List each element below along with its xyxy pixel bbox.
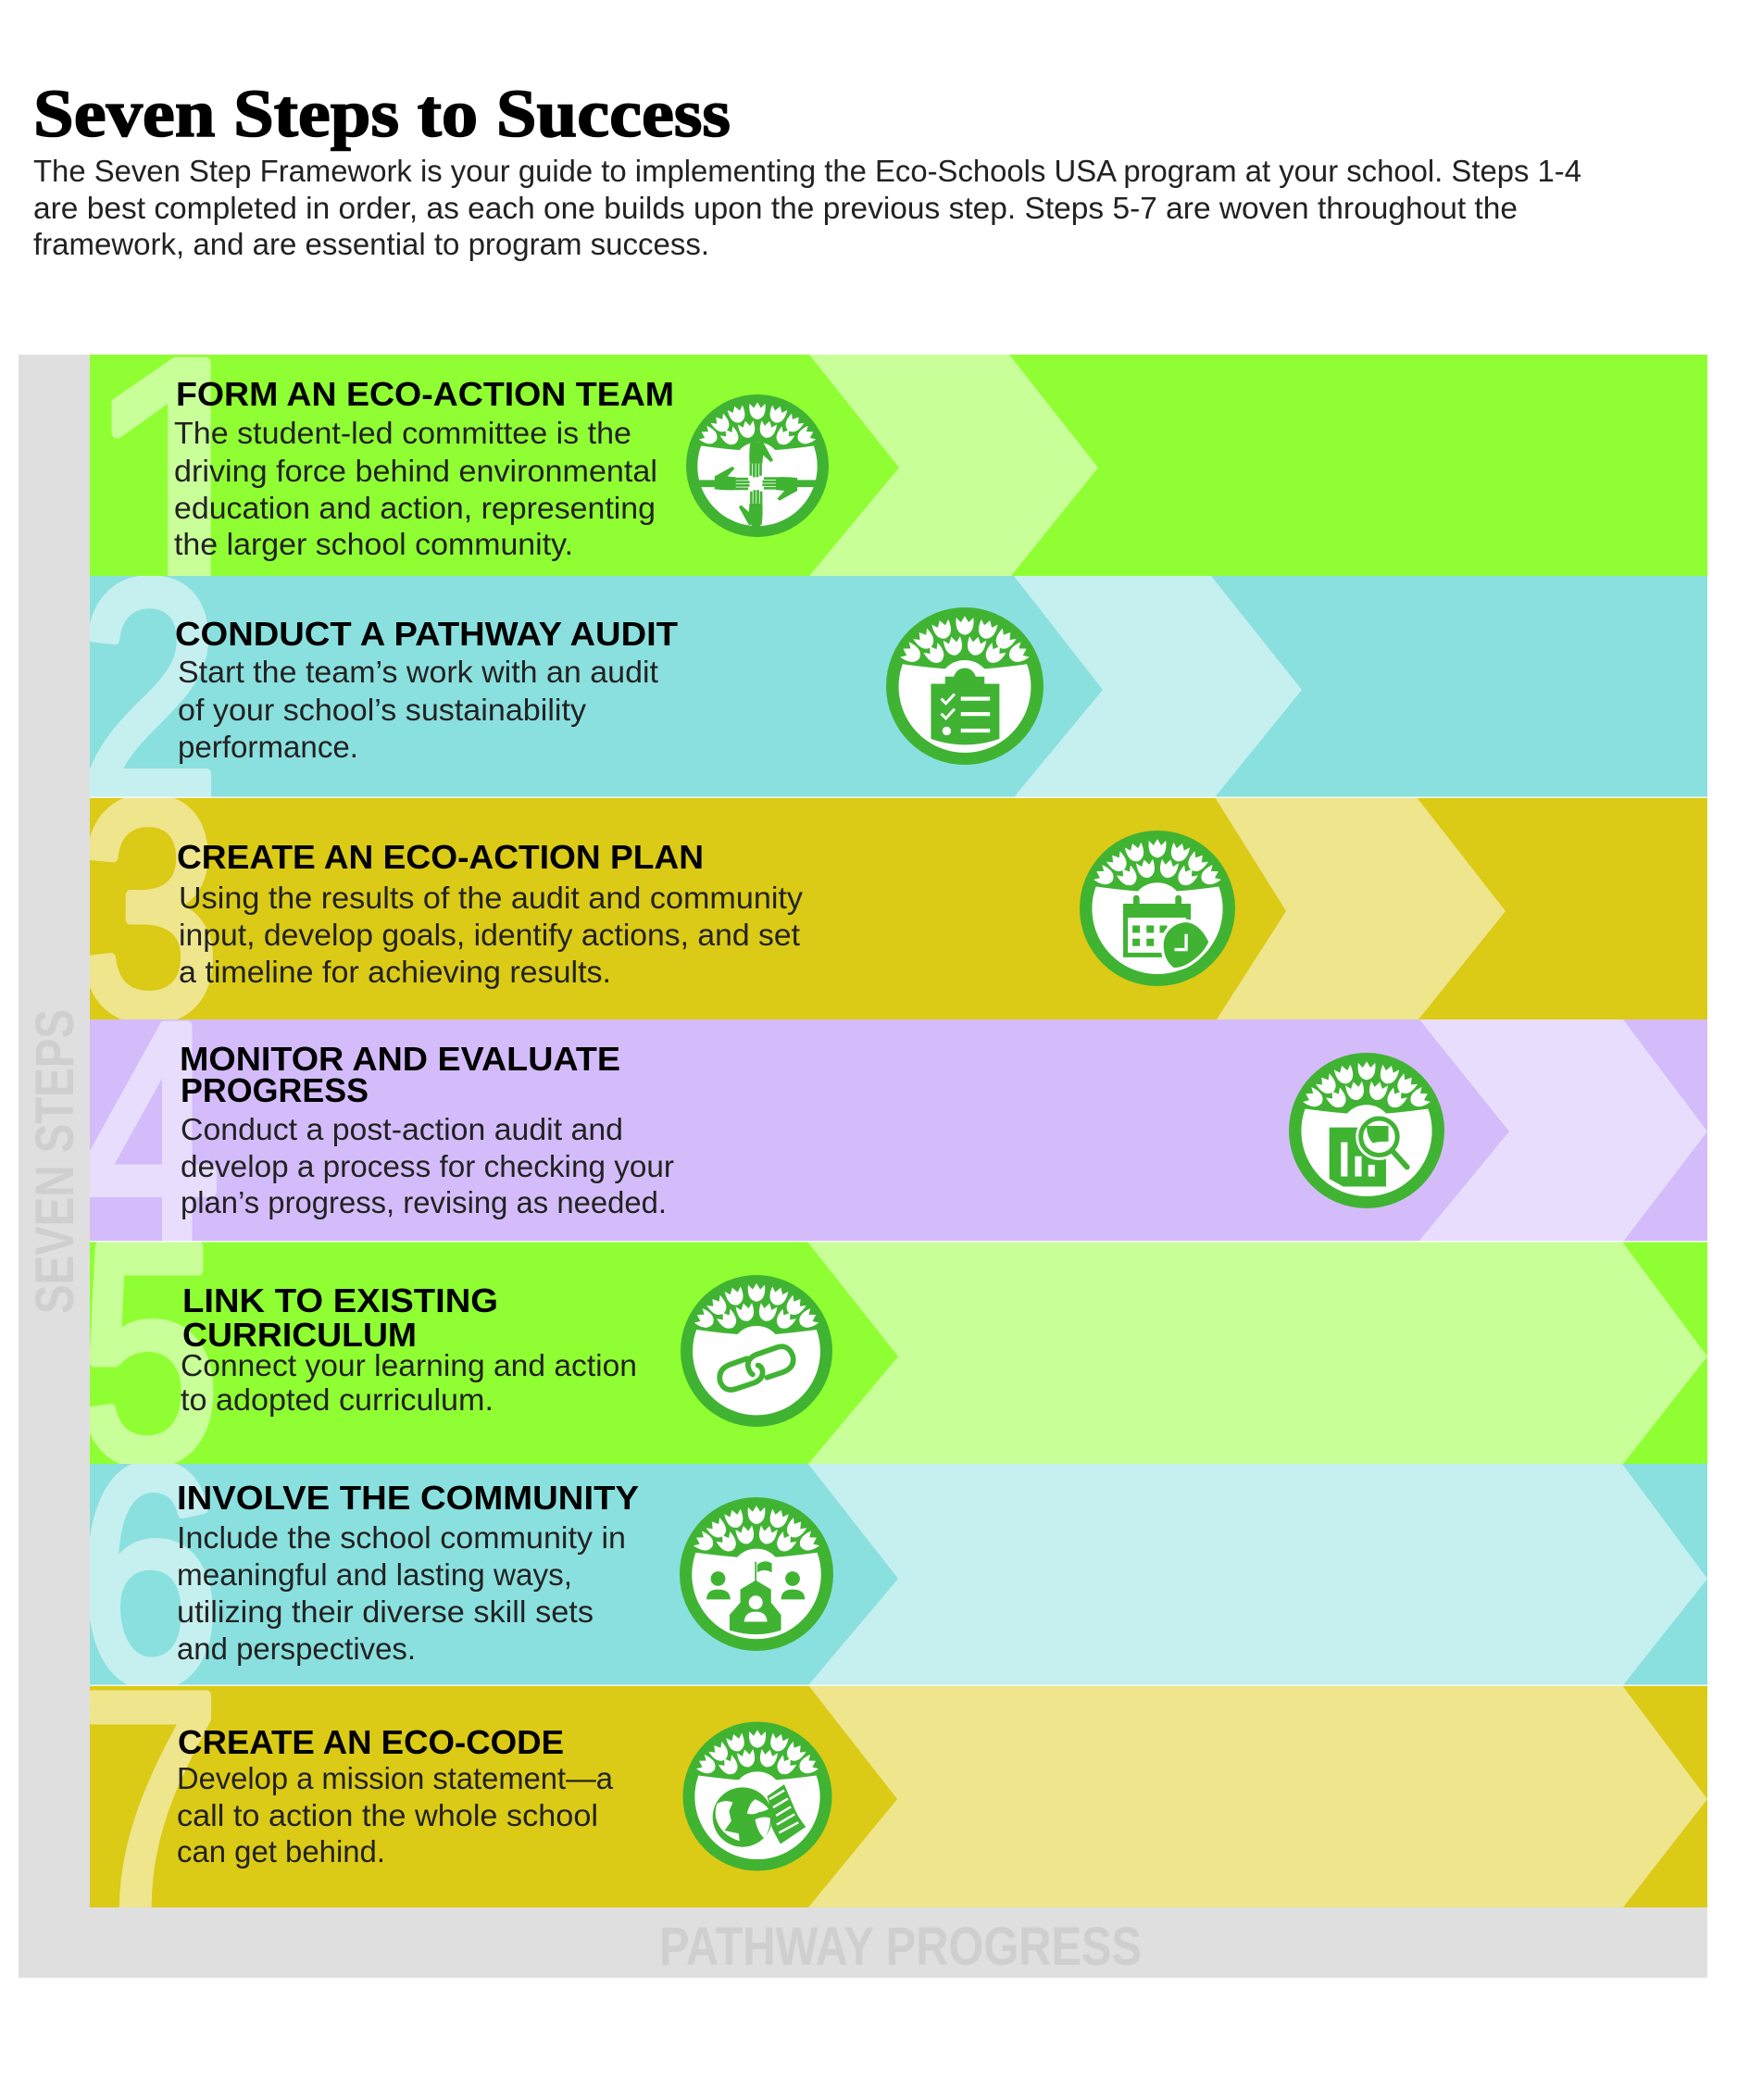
step 3 description: a timeline for achieving results. xyxy=(179,955,611,989)
step 5 heading: CURRICULUM xyxy=(182,1316,417,1354)
step 7 description xyxy=(177,1761,614,1869)
icon: clipboard checklist xyxy=(886,607,1043,765)
step 7 description: call to action the whole school xyxy=(177,1798,598,1832)
panel: step 3 xyxy=(90,797,1707,1019)
step 4 heading: PROGRESS xyxy=(181,1071,369,1109)
icon: four hands xyxy=(686,394,829,537)
step 3 description: Using the results of the audit and community xyxy=(179,881,804,915)
numeral 5: 5 xyxy=(79,1180,219,1526)
step 7 heading: CREATE AN ECO-CODE xyxy=(178,1723,564,1761)
step 4 description: develop a process for checking your xyxy=(181,1149,674,1183)
intro text block: are best completed in order, as each one builds upon the previous step. Steps 5-7 are woven throughout the xyxy=(33,191,1518,225)
step 1 description: the larger school community. xyxy=(174,527,573,561)
step 5 description xyxy=(181,1348,637,1417)
panel: step 7 xyxy=(90,1685,1707,1907)
chevron: step 2 progress xyxy=(1014,576,1302,797)
panel: step 5 xyxy=(90,1242,1707,1464)
step 4 description: plan’s progress, revising as needed. xyxy=(181,1185,667,1219)
step 2 description xyxy=(178,655,658,764)
step 5 heading: LINK TO EXISTING xyxy=(182,1281,498,1319)
intro text block: The Seven Step Framework is your guide to implementing the Eco-Schools USA program at your school. Steps 1-4 xyxy=(33,154,1581,188)
step 3 description: input, develop goals, identify actions, and set xyxy=(179,918,800,952)
step 5 description: Connect your learning and action xyxy=(181,1348,637,1382)
step 1 heading: FORM AN ECO-ACTION TEAM xyxy=(176,375,674,413)
step 5 heading xyxy=(182,1281,498,1354)
panel: step 6 xyxy=(90,1464,1707,1685)
step 1 description xyxy=(174,416,657,561)
axis label: seven steps: SEVEN STEPS xyxy=(25,1009,85,1314)
chevron: step 7 progress xyxy=(808,1685,1707,1907)
step 2 description: performance. xyxy=(178,730,358,764)
panel: step 4 xyxy=(90,1019,1707,1242)
step 6 description: and perspectives. xyxy=(177,1631,416,1666)
icon: chain link xyxy=(681,1275,832,1427)
icon: globe and document xyxy=(683,1722,831,1870)
step 3 heading: CREATE AN ECO-ACTION PLAN xyxy=(177,838,704,876)
step 4 description: Conduct a post-action audit and xyxy=(181,1112,623,1146)
chevron: step 6 progress xyxy=(808,1464,1707,1685)
step 2 heading: CONDUCT A PATHWAY AUDIT xyxy=(175,615,678,653)
step 7 description: Develop a mission statement—a xyxy=(177,1761,614,1795)
panel: step 1 xyxy=(90,355,1707,576)
step 7 description: can get behind. xyxy=(177,1834,385,1869)
numeral 1: 1 xyxy=(82,284,283,688)
step 6 description: meaningful and lasting ways, xyxy=(177,1557,572,1592)
step 6 heading: INVOLVE THE COMMUNITY xyxy=(177,1479,639,1517)
step 6 description: Include the school community in xyxy=(177,1520,626,1555)
title: Seven Steps to Success xyxy=(33,76,731,151)
intro text block: framework, and are essential to program success. xyxy=(33,227,709,261)
step 3 description xyxy=(179,881,804,989)
step 2 description: of your school’s sustainability xyxy=(178,693,587,727)
step 1 description: The student-led committee is the xyxy=(174,416,631,450)
step 5 description: to adopted curriculum. xyxy=(181,1382,494,1417)
band seams xyxy=(90,796,1707,1686)
chevron: step 4 progress xyxy=(1418,1019,1707,1242)
step 1 description: education and action, representing xyxy=(174,491,656,525)
numeral 4: 4 xyxy=(79,959,219,1306)
chevron: step 3 progress xyxy=(1215,797,1506,1019)
step 6 description xyxy=(177,1520,626,1666)
chevron: step 5 progress xyxy=(807,1242,1707,1464)
numeral 6: 6 xyxy=(79,1401,219,1747)
numeral 3: 3 xyxy=(79,735,219,1081)
panel: grey axis frame xyxy=(19,355,1707,1978)
step 2 description: Start the team’s work with an audit xyxy=(178,655,658,689)
step 6 description: utilizing their diverse skill sets xyxy=(177,1594,594,1629)
step 4 heading: MONITOR AND EVALUATE xyxy=(180,1040,620,1078)
icon: calendar and clock xyxy=(1080,831,1235,986)
numeral 2: 2 xyxy=(79,517,219,863)
step 4 heading xyxy=(180,1040,620,1109)
icon: school and people xyxy=(680,1497,833,1651)
chevron: step 1 progress xyxy=(809,355,1098,576)
icon: chart and magnifier xyxy=(1289,1053,1444,1208)
axis label: pathway progress: PATHWAY PROGRESS xyxy=(659,1917,1142,1977)
intro text block xyxy=(33,154,1581,261)
step 4 description xyxy=(181,1112,674,1219)
step 1 description: driving force behind environmental xyxy=(174,454,657,488)
panel: step 2 xyxy=(90,576,1707,797)
numeral 7: 7 xyxy=(79,1629,219,1975)
